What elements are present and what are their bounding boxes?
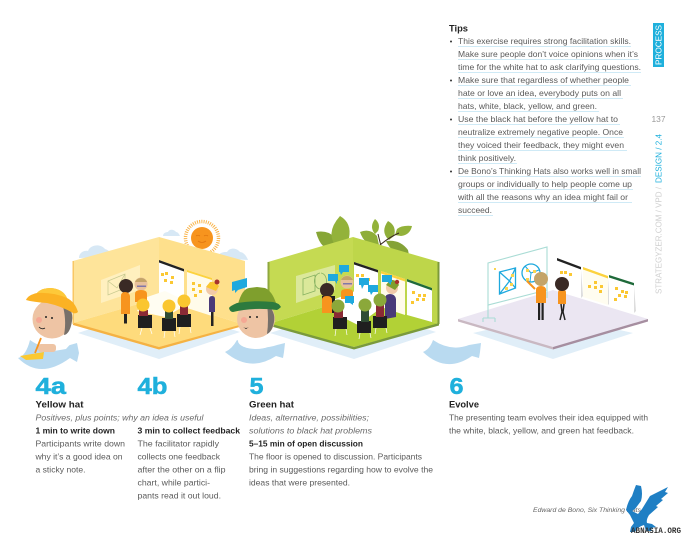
seated participants and facilitator xyxy=(320,276,399,339)
step 6: evolve: The presenting team evolves their idea equipped with xyxy=(449,413,648,423)
tab: process: PROCESS xyxy=(654,25,664,65)
illustration: evolve room xyxy=(458,247,648,359)
step 5: green hat: Ideas, alternative, possibilities; xyxy=(249,413,370,423)
illustration: yellow hat room xyxy=(72,222,248,359)
step 6: evolve: the white, black, yellow, and green hat feedback. xyxy=(449,426,634,436)
flip charts xyxy=(354,262,432,322)
tip list: groups or individually to help people come up xyxy=(458,179,632,189)
step 6: evolve: Evolve xyxy=(449,400,479,410)
step 4b: feedback xyxy=(138,373,240,501)
step 5: green hat xyxy=(249,373,433,488)
tip list: time for the white hat to ask clarifying questions. xyxy=(458,62,641,72)
step 4b: feedback: pants read it out loud. xyxy=(138,491,221,501)
flip charts xyxy=(557,258,636,313)
floor xyxy=(458,290,648,350)
icon: sun xyxy=(186,222,218,254)
step 4a: yellow hat: why it’s a good idea on xyxy=(34,452,123,462)
watermark logo xyxy=(626,485,681,536)
sidebar navigation xyxy=(652,23,666,294)
tip list: hats, white, black, yellow, and green. xyxy=(458,101,597,111)
room walls and floor xyxy=(72,237,245,350)
speech bubbles xyxy=(328,265,392,305)
tip list: neutralize extremely negative people. Once xyxy=(458,127,623,137)
step number: 6 xyxy=(450,373,464,399)
character: green hat man with arrow xyxy=(225,278,285,364)
site label: strategyzer: STRATEGYZER.COM / VPD / xyxy=(654,186,664,294)
panel: tips xyxy=(449,24,641,216)
step number: 5 xyxy=(250,373,264,399)
page number: 137 xyxy=(652,115,666,124)
table xyxy=(137,291,190,317)
section label: design: DESIGN / 2.4 xyxy=(654,133,664,183)
presenters xyxy=(119,278,148,324)
step 4a: yellow hat: Yellow hat xyxy=(36,400,84,410)
step 4b: feedback: 3 min to collect feedback xyxy=(138,426,240,436)
step 4b: feedback: collects one feedback xyxy=(138,452,221,462)
tip list: think positively. xyxy=(458,153,516,163)
tip list: they voiced their feedback, they might even xyxy=(458,140,624,150)
heading: tips: Tips xyxy=(449,24,468,34)
table xyxy=(332,291,385,325)
tip list: Use the black hat before the yellow hat to xyxy=(458,114,618,124)
seated participants in yellow hats xyxy=(136,294,191,338)
head xyxy=(237,300,275,338)
hat xyxy=(26,288,78,313)
tip list: succeed. xyxy=(458,205,492,215)
whiteboard with canvas sketches xyxy=(483,247,547,322)
step 4b: feedback: after the other on a flip xyxy=(138,465,226,475)
tip list: Make sure people don’t voice opinions when it’s xyxy=(458,49,638,59)
floor shadow xyxy=(270,306,436,359)
clouds and floor shadow xyxy=(78,230,248,359)
collar xyxy=(42,336,74,352)
hand xyxy=(38,344,56,352)
step 5: green hat: Green hat xyxy=(249,400,295,410)
step 4b: feedback: chart, while partici- xyxy=(138,478,210,488)
step number: 4b xyxy=(138,373,168,399)
character: yellow hat man with arrow xyxy=(18,288,79,369)
leaves xyxy=(316,216,412,255)
presenting team xyxy=(527,272,569,320)
icon: griffin xyxy=(626,485,668,532)
arrow xyxy=(225,340,285,364)
step 4a: yellow hat: a sticky note. xyxy=(36,465,86,475)
illustration: green hat room xyxy=(268,216,440,359)
hair xyxy=(62,303,72,335)
tip list: This exercise requires strong facilitation skills. xyxy=(458,36,631,46)
arrow: to evolve xyxy=(423,340,481,364)
hat xyxy=(238,287,276,304)
step 4a: yellow hat: Positives, plus points; why an idea is useful xyxy=(36,413,205,423)
tip list: hate or love an idea, everybody puts on all xyxy=(458,88,621,98)
floor shadow xyxy=(473,315,633,359)
tip list: De Bono’s Thinking Hats also works well in small xyxy=(458,166,641,176)
step 4a: yellow hat xyxy=(34,373,205,475)
step 5: green hat: The floor is opened to discussion. Participants xyxy=(249,452,422,462)
step 5: green hat: solutions to black hat problems xyxy=(249,426,372,436)
arrow xyxy=(18,340,79,369)
sticky note and pencil xyxy=(20,352,44,360)
step 5: green hat: ideas that were presented. xyxy=(249,478,350,488)
citation: Edward de Bono, Six Thinking Hats xyxy=(533,507,641,514)
step 5: green hat: 5–15 min of open discussion xyxy=(249,439,363,449)
tip list: Make sure that regardless of whether people xyxy=(458,75,629,85)
step 6: evolve xyxy=(449,373,648,436)
step number: 4a xyxy=(36,373,66,399)
room walls and floor xyxy=(268,237,440,350)
flip charts xyxy=(159,260,212,316)
step 4a: yellow hat: 1 min to write down xyxy=(36,426,115,436)
step 4b: feedback: The facilitator rapidly xyxy=(138,439,220,449)
facilitator xyxy=(206,280,220,326)
white collar xyxy=(238,333,274,349)
step 5: green hat: bring in suggestions regarding how to evolve the xyxy=(249,465,433,475)
step 4a: yellow hat: Participants write down xyxy=(36,439,125,449)
speech bubble xyxy=(232,278,247,293)
tip list xyxy=(450,36,641,216)
head xyxy=(32,300,72,338)
tip list: with all the reasons why an idea might fail or xyxy=(457,192,628,202)
face xyxy=(36,316,53,329)
